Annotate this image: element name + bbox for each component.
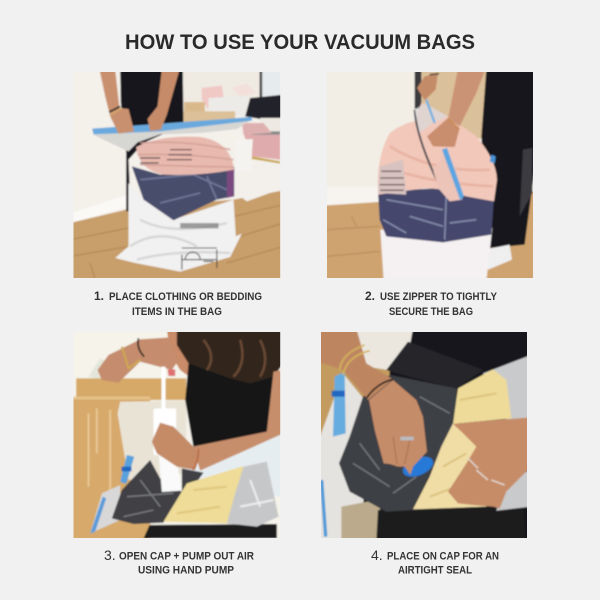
step 1 caption: ITEMS IN THE BAG	[132, 306, 222, 318]
photo: placing the cap for an airtight seal	[321, 332, 527, 538]
step 4 caption: PLACE ON CAP FOR AN	[387, 550, 499, 562]
title: HOW TO USE YOUR VACUUM BAGS	[125, 31, 475, 54]
step 2 caption	[380, 291, 498, 318]
panel: step 1	[70, 69, 284, 318]
step 1 caption: PLACE CLOTHING OR BEDDING	[109, 291, 262, 303]
step 3 number: 3.	[104, 547, 116, 563]
photo: filling the bag with clothing	[74, 72, 280, 278]
step 4 caption: AIRTIGHT SEAL	[398, 564, 472, 576]
step 4 number: 4.	[371, 547, 383, 563]
photo: pumping air out with hand pump	[74, 332, 280, 538]
panel: step 4	[318, 329, 531, 576]
step 3 caption	[119, 550, 254, 576]
step 2 caption: USE ZIPPER TO TIGHTLY	[380, 291, 498, 303]
step 2 number: 2.	[365, 289, 375, 303]
step 3 caption: USING HAND PUMP	[138, 564, 234, 576]
step 2 caption: SECURE THE BAG	[389, 306, 473, 318]
step 3 caption: OPEN CAP + PUMP OUT AIR	[119, 550, 254, 562]
step 1 number: 1.	[94, 289, 104, 303]
step 4 caption	[387, 550, 499, 576]
step 1 caption	[109, 291, 262, 318]
panel: step 3	[70, 329, 284, 576]
photo: zipping the bag shut	[327, 72, 533, 278]
panel: step 2	[323, 69, 536, 318]
